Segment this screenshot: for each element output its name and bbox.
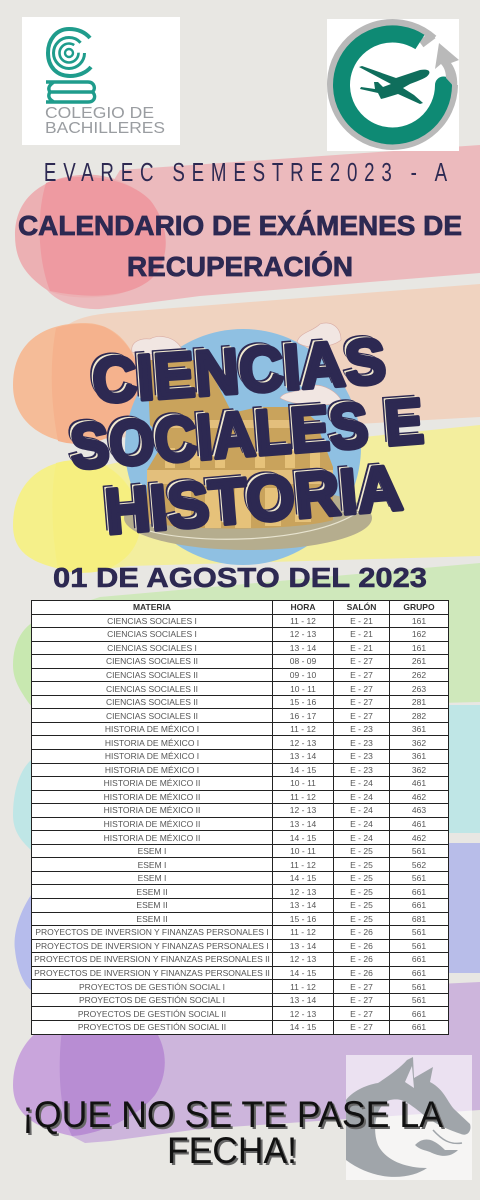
schedule table: E - 23 [350, 751, 373, 761]
schedule table: E - 26 [350, 941, 373, 951]
schedule table: 282 [412, 711, 426, 721]
schedule table: 10 - 11 [290, 846, 316, 856]
schedule table: HISTORIA DE MÉXICO I [105, 751, 199, 761]
schedule table: E - 27 [350, 982, 373, 992]
schedule table: 661 [412, 968, 426, 978]
schedule table: 13 - 14 [290, 900, 316, 910]
schedule table: 16 - 17 [290, 711, 316, 721]
icon: B [46, 82, 95, 102]
schedule table: ESEM I [138, 860, 166, 870]
schedule table: E - 24 [350, 792, 373, 802]
schedule table: HISTORIA DE MÉXICO II [104, 819, 200, 829]
schedule table: 12 - 13 [290, 1009, 316, 1019]
schedule table: 362 [412, 738, 426, 748]
schedule table: CIENCIAS SOCIALES II [106, 711, 198, 721]
schedule table: 561 [412, 927, 426, 937]
schedule table: E - 24 [350, 778, 373, 788]
schedule table: 461 [412, 819, 426, 829]
schedule table: 10 - 11 [290, 684, 316, 694]
schedule table: 561 [412, 982, 426, 992]
schedule table: 462 [412, 792, 426, 802]
schedule table: HISTORIA DE MÉXICO I [105, 738, 199, 748]
schedule table: HISTORIA DE MÉXICO I [105, 765, 199, 775]
line: Sociales e: SOCIALES E [65, 382, 423, 481]
main title: Ciencias Sociales e Historia [63, 321, 426, 548]
schedule table: CIENCIAS SOCIALES I [107, 643, 197, 653]
line: Historia: HISTORIA [99, 449, 402, 546]
schedule table: 12 - 13 [290, 805, 316, 815]
line: Sociales e: SOCIALES E [63, 381, 422, 479]
band: peach [13, 284, 480, 444]
schedule table: 262 [412, 670, 426, 680]
schedule table: 15 - 16 [290, 914, 316, 924]
schedule table: PROYECTOS DE INVERSION Y FINANZAS PERSONALES I [35, 927, 269, 937]
schedule table: E - 27 [350, 1022, 373, 1032]
schedule table: E - 27 [350, 697, 373, 707]
schedule table: CIENCIAS SOCIALES II [106, 684, 198, 694]
closing message: FECHA! [169, 1132, 299, 1173]
line: Historia: HISTORIA [98, 448, 401, 544]
schedule table: 14 - 15 [290, 873, 316, 883]
schedule table: 12 - 13 [290, 954, 316, 964]
schedule table: E - 23 [350, 765, 373, 775]
schedule table: E - 23 [350, 738, 373, 748]
schedule table: E - 25 [350, 873, 373, 883]
logo text: BACHILLERES [45, 120, 165, 137]
schedule table: E - 27 [350, 684, 373, 694]
schedule table: 11 - 12 [290, 616, 316, 626]
band: pink [15, 145, 480, 309]
band: green [13, 563, 480, 712]
schedule table: 08 - 09 [290, 656, 316, 666]
line: Ciencias: CIENCIAS [87, 322, 386, 415]
band: yellow [13, 425, 480, 573]
schedule table: 263 [412, 684, 426, 694]
schedule table: 13 - 14 [290, 643, 316, 653]
schedule table: PROYECTOS DE INVERSION Y FINANZAS PERSONALES II [34, 968, 270, 978]
icon: plane [359, 66, 429, 104]
line: Ciencias: CIENCIAS [90, 325, 388, 417]
schedule table: 10 - 11 [290, 778, 316, 788]
schedule table: 162 [412, 629, 426, 639]
closing message: FECHA! [167, 1130, 297, 1171]
schedule table: HISTORIA DE MÉXICO II [104, 805, 200, 815]
schedule table: 13 - 14 [290, 941, 316, 951]
band: teal [13, 705, 480, 850]
logo text [45, 105, 165, 137]
schedule table: PROYECTOS DE GESTIÓN SOCIAL II [78, 1009, 226, 1019]
subtitle: EVAREC SEMESTRE2023 - A [44, 157, 448, 187]
schedule table: E - 25 [350, 846, 373, 856]
schedule table: E - 21 [350, 643, 373, 653]
band: violet [15, 843, 480, 990]
schedule table: E - 21 [350, 629, 373, 639]
schedule table: ESEM II [136, 900, 168, 910]
schedule table: E - 21 [350, 616, 373, 626]
schedule table: E - 24 [350, 819, 373, 829]
schedule table: 15 - 16 [290, 697, 316, 707]
schedule table: HISTORIA DE MÉXICO II [104, 778, 200, 788]
heading [18, 210, 462, 282]
schedule table: E - 23 [350, 724, 373, 734]
schedule table: 261 [412, 656, 426, 666]
schedule table: 11 - 12 [290, 792, 316, 802]
schedule table: ESEM II [136, 887, 168, 897]
schedule table: 661 [412, 900, 426, 910]
schedule table: 661 [412, 1022, 426, 1032]
schedule table: E - 26 [350, 954, 373, 964]
schedule table: 361 [412, 724, 426, 734]
icon: arrow [435, 43, 459, 90]
schedule table: ESEM I [138, 873, 166, 883]
schedule table: 361 [412, 751, 426, 761]
schedule table: PROYECTOS DE INVERSION Y FINANZAS PERSONALES I [35, 941, 269, 951]
closing message [22, 1094, 445, 1173]
schedule table: 12 - 13 [290, 629, 316, 639]
schedule table: E - 27 [350, 995, 373, 1005]
closing message: ¡QUE NO SE TE PASE LA [22, 1094, 443, 1135]
schedule table: E - 25 [350, 860, 373, 870]
schedule table: 161 [412, 643, 426, 653]
heading: CALENDARIO DE EXÁMENES DE [18, 210, 462, 241]
schedule table: CIENCIAS SOCIALES I [107, 616, 197, 626]
schedule table: 161 [412, 616, 426, 626]
schedule table: PROYECTOS DE GESTIÓN SOCIAL I [79, 995, 225, 1005]
schedule table: CIENCIAS SOCIALES II [106, 656, 198, 666]
schedule table: E - 24 [350, 805, 373, 815]
schedule table: 14 - 15 [290, 1022, 316, 1032]
heading: RECUPERACIÓN [127, 251, 353, 282]
schedule table: 14 - 15 [290, 968, 316, 978]
mascot: wolf [346, 1055, 472, 1180]
schedule table: 661 [412, 954, 426, 964]
clouds [132, 323, 342, 405]
schedule table: E - 26 [350, 927, 373, 937]
schedule table: 463 [412, 805, 426, 815]
schedule table: 11 - 12 [290, 927, 316, 937]
schedule table: 13 - 14 [290, 819, 316, 829]
schedule table: 281 [412, 697, 426, 707]
schedule table: E - 27 [350, 656, 373, 666]
schedule table: E - 25 [350, 887, 373, 897]
logo: Colegio de Bachilleres [22, 17, 180, 145]
schedule table: E - 27 [350, 1009, 373, 1019]
schedule table: PROYECTOS DE INVERSION Y FINANZAS PERSONALES II [34, 954, 270, 964]
schedule table: 11 - 12 [290, 860, 316, 870]
illustration: colosseum [124, 323, 372, 565]
schedule table: 561 [412, 941, 426, 951]
schedule table: E - 26 [350, 968, 373, 978]
schedule table: 561 [412, 846, 426, 856]
schedule table: 561 [412, 873, 426, 883]
schedule table: 461 [412, 778, 426, 788]
schedule table: ESEM II [136, 914, 168, 924]
schedule table: HISTORIA DE MÉXICO II [104, 833, 200, 843]
schedule table: 11 - 12 [290, 724, 316, 734]
schedule table: CIENCIAS SOCIALES II [106, 670, 198, 680]
schedule table: E - 27 [350, 670, 373, 680]
schedule table: E - 25 [350, 900, 373, 910]
schedule table: HISTORIA DE MÉXICO II [104, 792, 200, 802]
schedule table: 462 [412, 833, 426, 843]
schedule table: 561 [412, 995, 426, 1005]
schedule table: 09 - 10 [290, 670, 316, 680]
schedule table: MATERIA [133, 602, 171, 612]
schedule table: 562 [412, 860, 426, 870]
schedule table: SALÓN [347, 602, 376, 612]
schedule table: HISTORIA DE MÉXICO I [105, 724, 199, 734]
line: Historia: HISTORIA [102, 451, 405, 548]
band: purple [13, 982, 480, 1143]
schedule table: E - 24 [350, 833, 373, 843]
schedule table: E - 25 [350, 914, 373, 924]
schedule table: GRUPO [403, 602, 435, 612]
schedule table: CIENCIAS SOCIALES II [106, 697, 198, 707]
schedule table: PROYECTOS DE GESTIÓN SOCIAL I [79, 982, 225, 992]
schedule table [31, 600, 449, 1034]
closing message: ¡QUE NO SE TE PASE LA [24, 1096, 445, 1137]
logo text: COLEGIO DE [45, 105, 154, 122]
schedule table: 13 - 14 [290, 751, 316, 761]
schedule table: 12 - 13 [290, 738, 316, 748]
schedule table: 362 [412, 765, 426, 775]
schedule table: 11 - 12 [290, 982, 316, 992]
schedule table: HORA [290, 602, 316, 612]
schedule table: 661 [412, 1009, 426, 1019]
line: Sociales e: SOCIALES E [68, 385, 426, 483]
schedule table: ESEM I [138, 846, 166, 856]
schedule table: 14 - 15 [290, 833, 316, 843]
schedule table: CIENCIAS SOCIALES I [107, 629, 197, 639]
logo: plane circle [327, 19, 459, 151]
line: Ciencias: CIENCIAS [86, 321, 384, 413]
schedule table: 12 - 13 [290, 887, 316, 897]
schedule table: 681 [412, 914, 426, 924]
date: 01 DE AGOSTO DEL 2023 [53, 562, 427, 593]
schedule table: 14 - 15 [290, 765, 316, 775]
schedule table: E - 27 [350, 711, 373, 721]
schedule table: 661 [412, 887, 426, 897]
icon: spiral [48, 29, 91, 76]
schedule table: 13 - 14 [290, 995, 316, 1005]
schedule table: PROYECTOS DE GESTIÓN SOCIAL II [78, 1022, 226, 1032]
